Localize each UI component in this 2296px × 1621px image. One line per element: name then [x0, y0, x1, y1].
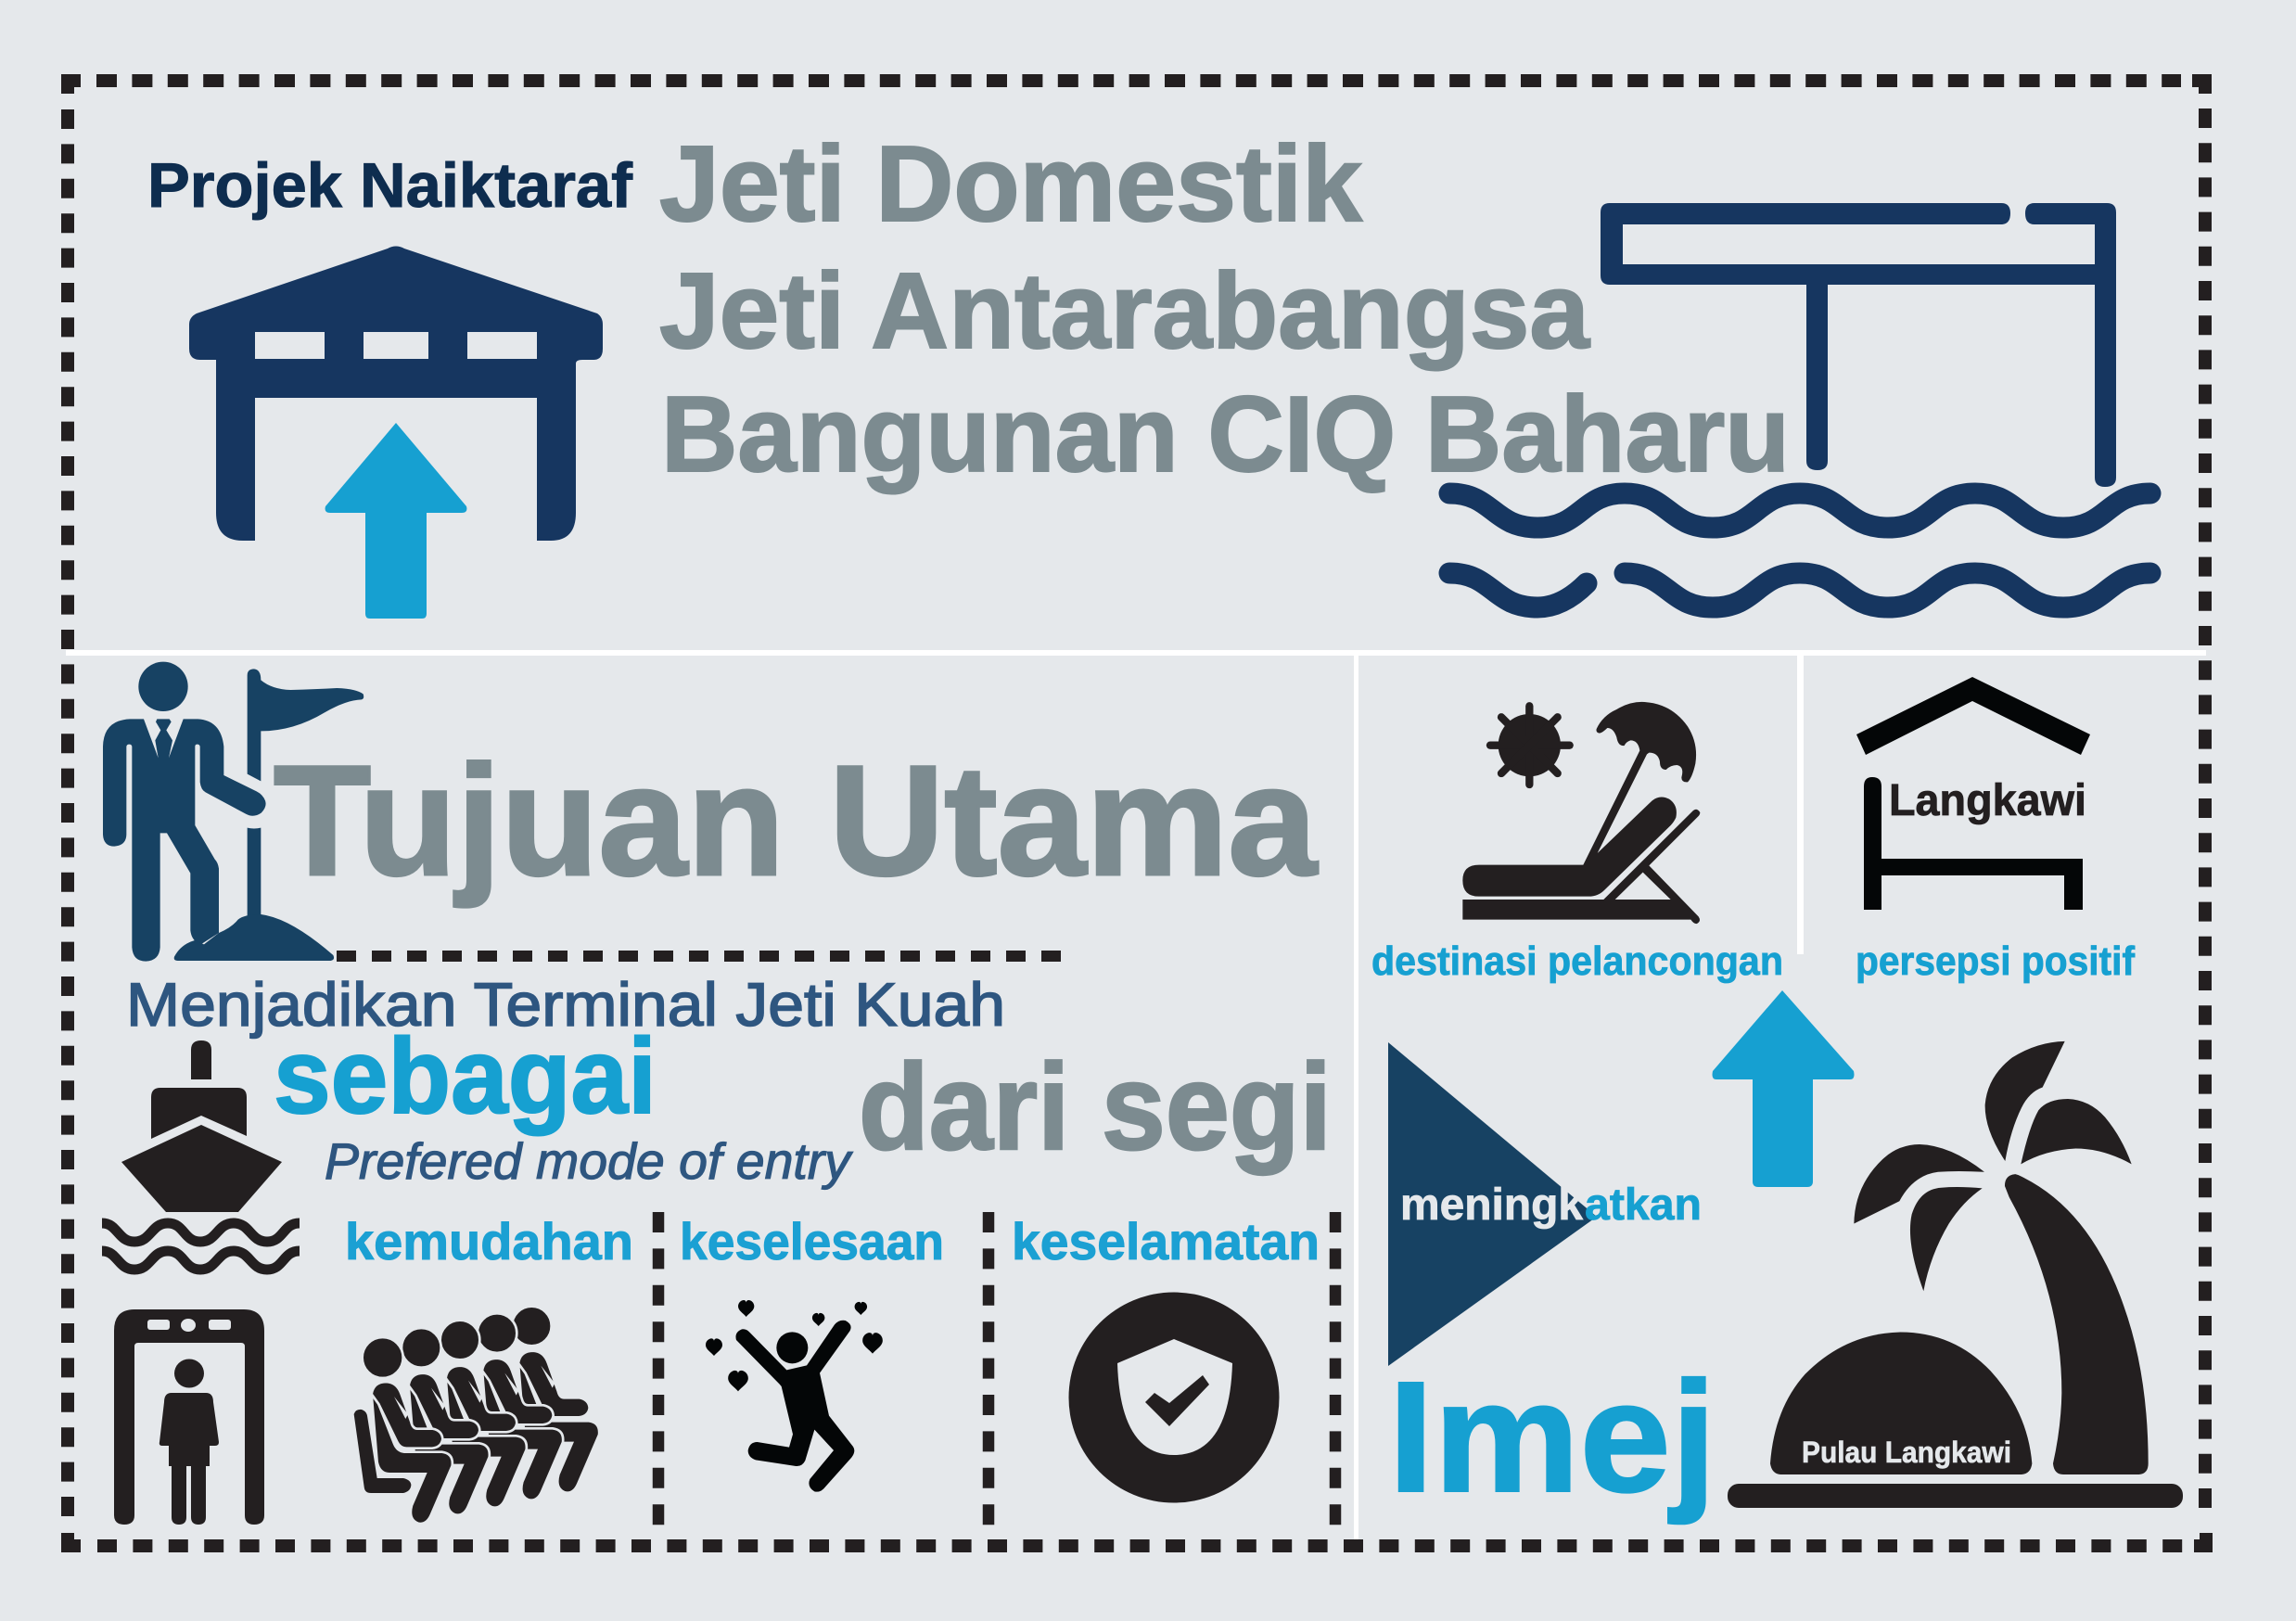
- arrow: increase: [1712, 990, 1855, 1187]
- icon: island base bar: [1728, 1484, 2183, 1508]
- icon: businessman with flag: [103, 662, 364, 962]
- text: meningkatkan: meningk: [1400, 1181, 1583, 1230]
- label: keselesaan: keselesaan: [680, 1212, 944, 1270]
- heading: Tujuan Utama: Tujuan Utama: [274, 733, 1319, 908]
- text: sebagai: sebagai: [274, 1017, 657, 1136]
- label: keselamatan: keselamatan: [1012, 1212, 1320, 1270]
- heading: Projek Naiktaraf: Projek Naiktaraf: [147, 150, 632, 221]
- text: Pulau Langkawi: Pulau Langkawi: [1802, 1436, 2011, 1469]
- label: persepsi positif: persepsi positif: [1856, 938, 2135, 984]
- icon: ship on waves: [102, 1040, 300, 1270]
- text: meningkatkan: atkan: [1585, 1181, 1702, 1230]
- icon: security scanner gate: [114, 1309, 264, 1525]
- heading: Jeti Domestik: Jeti Domestik: [659, 123, 1362, 244]
- text: Menjadikan Terminal Jeti Kuah: Menjadikan Terminal Jeti Kuah: [126, 970, 1005, 1039]
- icon: house over bed: [1856, 677, 2090, 910]
- text: dari segi: dari segi: [859, 1039, 1332, 1175]
- icon: shield with check in circle: [1068, 1293, 1280, 1502]
- text: Prefered mode of entry: Prefered mode of entry: [325, 1132, 854, 1190]
- text: Langkawi on bed: Langkawi: [1889, 776, 2086, 825]
- label: kemudahan: kemudahan: [345, 1212, 633, 1270]
- heading: Imej: Imej: [1388, 1349, 1716, 1525]
- icon: sun and beach lounger: [1462, 702, 1700, 924]
- icon: jetty on water: [1449, 203, 2150, 607]
- icon: row of seated passengers: [354, 1307, 599, 1524]
- icon: palm island: [1770, 1041, 2149, 1474]
- white panel dividers: [66, 650, 2206, 1539]
- text: meningkatkan: [1400, 1181, 1702, 1230]
- icon: terminal building with upgrade arrow: [189, 247, 603, 619]
- heading: Jeti Antarabangsa: Jeti Antarabangsa: [659, 250, 1590, 371]
- triangle: play pointer: [1388, 1042, 1597, 1366]
- dashed underline: [337, 951, 1063, 962]
- label: destinasi pelancongan: destinasi pelancongan: [1371, 938, 1783, 984]
- icon: jumping happy person with hearts: [706, 1300, 883, 1492]
- heading: Bangunan CIQ Baharu: Bangunan CIQ Baharu: [661, 374, 1790, 494]
- dashed column separators: [658, 1212, 1335, 1526]
